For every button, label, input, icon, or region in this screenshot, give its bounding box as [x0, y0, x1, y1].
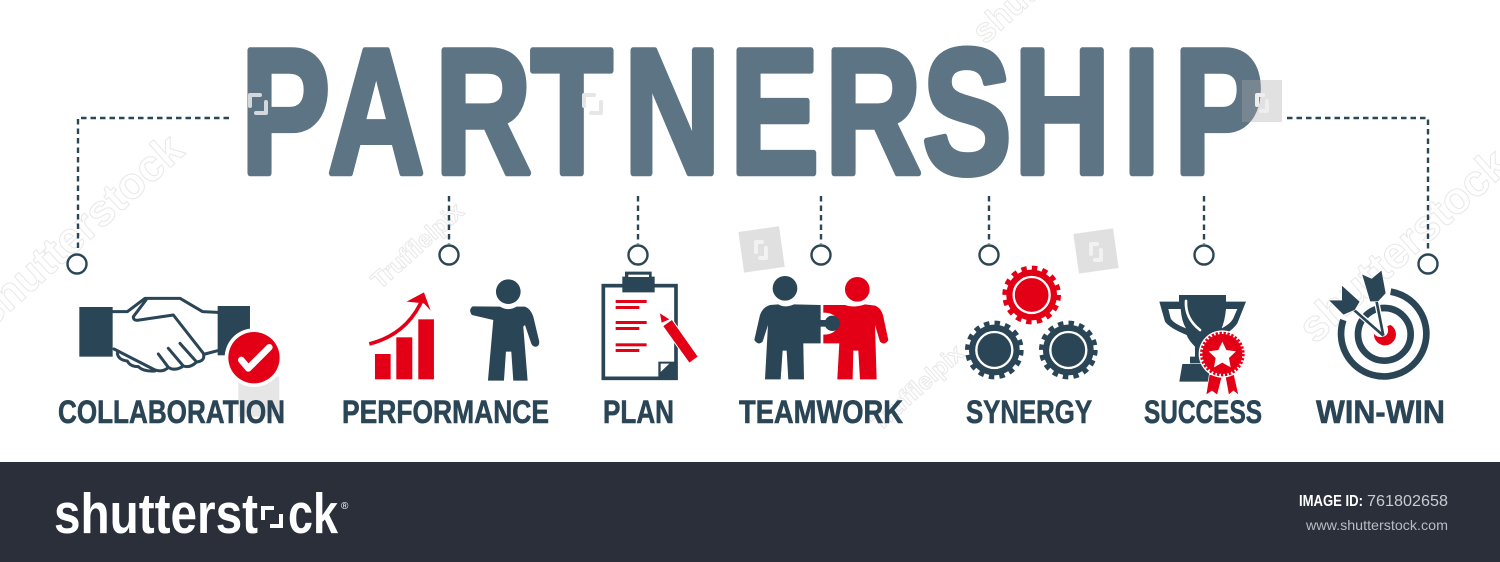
label: success: SUCCESS [1144, 394, 1262, 430]
website: www.shutterstock.com [1305, 517, 1448, 533]
label: plan: PLAN [603, 394, 674, 430]
gear: red [1005, 269, 1058, 321]
connector: teamwork [812, 196, 830, 264]
image id [1299, 493, 1448, 510]
label: win-win: WIN-WIN [1316, 394, 1445, 430]
connector: win-win [1287, 118, 1438, 274]
stock watermark squares [250, 80, 1282, 274]
label: synergy: SYNERGY [966, 394, 1092, 430]
connector: plan [628, 196, 648, 264]
label: performance: PERFORMANCE [342, 394, 549, 430]
gear: left [968, 324, 1021, 376]
footer logo: ck [288, 482, 338, 546]
label: collaboration: COLLABORATION [58, 394, 285, 430]
stock watermark text [0, 0, 1500, 436]
icon: trophy with rosette [1159, 295, 1246, 395]
title: PARTNERSHIP [241, 13, 1263, 211]
connector: synergy [980, 196, 998, 264]
icon: handshake with check badge [79, 298, 283, 417]
footer logo: ® [341, 501, 349, 512]
gear: right [1042, 324, 1095, 376]
stock watermark text: Trufflelpix [366, 197, 470, 294]
connector: performance [440, 196, 458, 264]
icon: three gears [968, 269, 1095, 376]
icon: growth chart and person [369, 279, 539, 381]
icon: target with darts [1328, 270, 1426, 376]
icon: clipboard and pencil [603, 272, 698, 380]
footer logo: shutterst [54, 482, 258, 546]
footer bar [0, 462, 1500, 562]
icon: two people joined by a puzzle piece [754, 276, 888, 379]
label: teamwork: TEAMWORK [739, 394, 903, 430]
stock watermark text: Trufflelpix [866, 339, 970, 436]
connector: collaboration [68, 118, 229, 274]
connector: success [1194, 196, 1214, 264]
image id: 761802658 [1367, 493, 1448, 510]
image id: IMAGE ID: [1299, 493, 1363, 510]
